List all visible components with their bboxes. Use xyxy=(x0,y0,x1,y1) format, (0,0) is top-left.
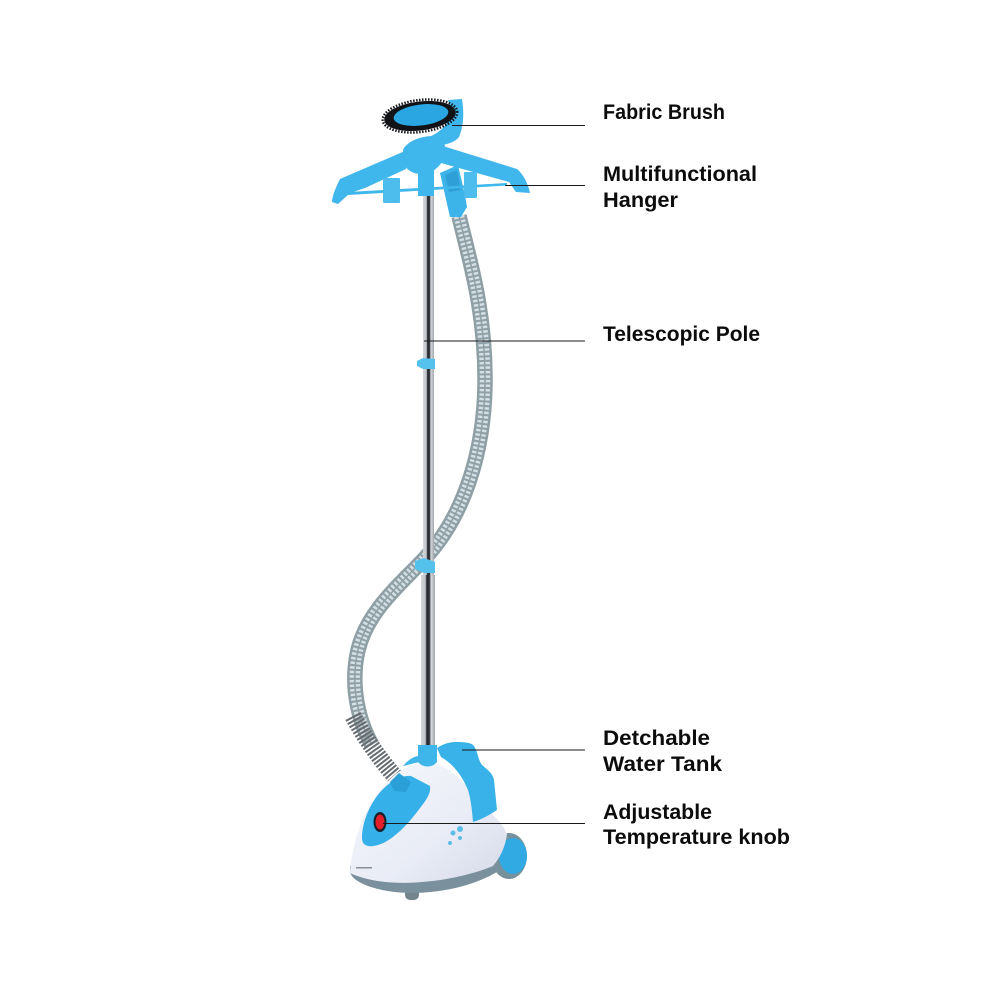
leader lines xyxy=(383,126,585,824)
brand mark xyxy=(356,867,372,868)
temperature knob xyxy=(374,812,386,832)
water tank xyxy=(437,742,497,822)
label: detachable water tank xyxy=(603,727,722,776)
hose clip lower xyxy=(415,558,435,573)
crossbar xyxy=(348,183,507,195)
label: multifunctional hanger: Multifunctional xyxy=(603,163,757,186)
label: adjustable temperature knob: Adjustable xyxy=(603,801,712,824)
label: adjustable temperature knob: Temperature knob xyxy=(603,826,790,849)
wheel xyxy=(491,833,527,879)
label: detachable water tank: Detchable xyxy=(603,727,710,750)
neck trim xyxy=(403,756,420,766)
garment clips xyxy=(383,178,400,203)
grey base rim xyxy=(350,860,497,893)
brush holder xyxy=(414,99,463,145)
foot xyxy=(405,886,419,900)
hose connector xyxy=(390,773,411,792)
hose nozzle xyxy=(440,165,467,217)
steam hose xyxy=(355,216,485,745)
pole collar xyxy=(418,745,437,766)
label: telescopic pole: Telescopic Pole xyxy=(603,323,760,346)
label: adjustable temperature knob xyxy=(603,801,790,849)
steamer base xyxy=(350,742,527,900)
centre stem xyxy=(418,168,434,196)
hanger arms xyxy=(332,151,406,204)
label: multifunctional hanger: Hanger xyxy=(603,189,678,212)
telescopic pole xyxy=(417,195,435,747)
label: detachable water tank: Water Tank xyxy=(603,753,722,776)
pole clip upper xyxy=(417,358,435,369)
indicator dots xyxy=(448,826,463,845)
fabric brush xyxy=(381,96,459,136)
blue control panel xyxy=(362,776,430,846)
multifunctional hanger xyxy=(332,99,530,217)
spring guard xyxy=(353,716,398,780)
label: multifunctional hanger xyxy=(603,163,757,212)
centre hub xyxy=(403,136,445,174)
label: fabric brush: Fabric Brush xyxy=(603,101,725,124)
white body xyxy=(350,762,507,883)
